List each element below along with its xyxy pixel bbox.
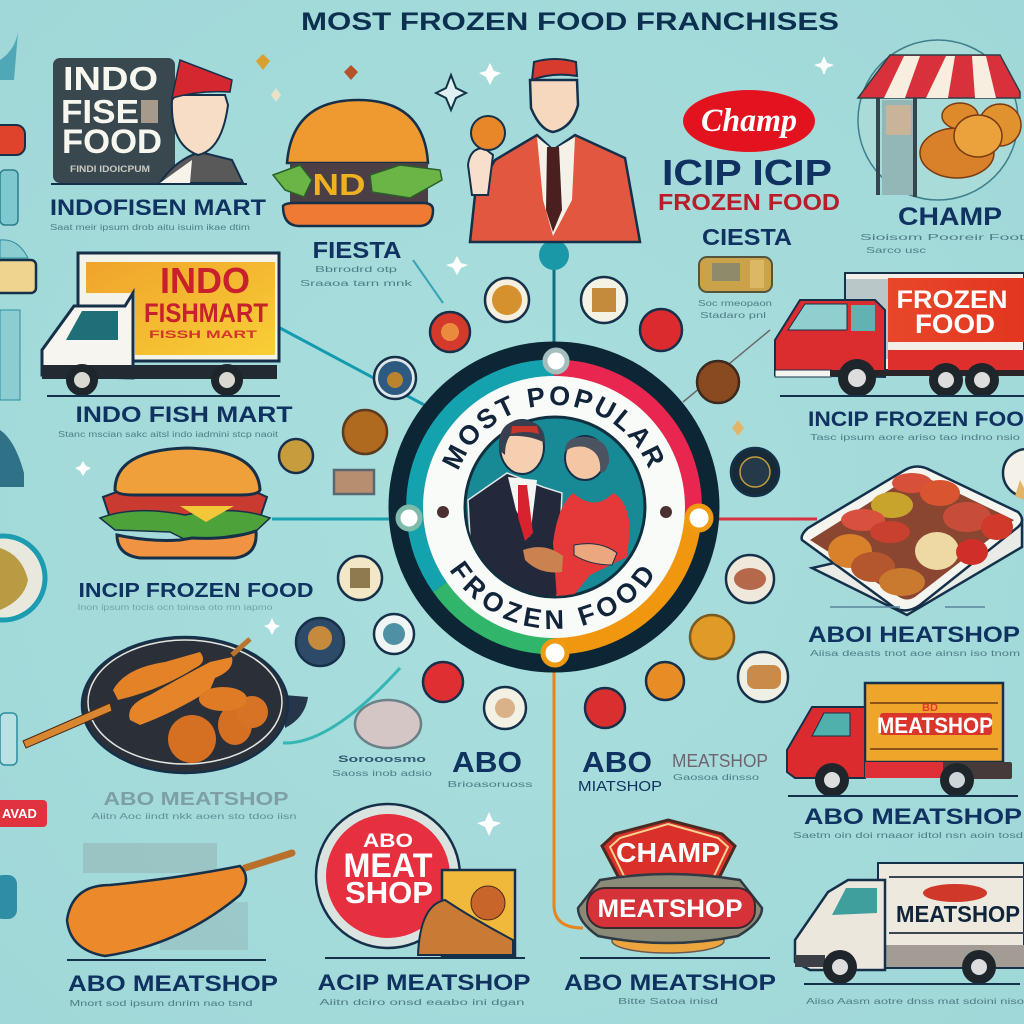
- icon: white Meatshop truck: [795, 863, 1024, 984]
- hub portrait: two franchise owners: [465, 417, 645, 600]
- panel: Icip Icip logo: FROZEN FOOD: [658, 189, 840, 215]
- label: Acip Meatshop: [318, 970, 530, 1007]
- label: Abo Meatshop bottom left: Mnort sod ipsum dnrim nao tsnd: [70, 999, 252, 1008]
- icon: Skillet with skewers: [23, 637, 308, 773]
- label: Abo Heat Shop: Aiisa deasts tnot aoe ainsn iso tnom: [810, 649, 1021, 658]
- left edge fragments: AVAD: [2, 806, 37, 821]
- panel: Indofisen Mart logo: FOOD: [62, 123, 162, 161]
- label: Indo Fish Mart: [58, 402, 293, 439]
- faded map behind sausage: [83, 843, 248, 950]
- panel: Indofisen Mart logo: INDO: [63, 60, 158, 97]
- label: Champ: [860, 203, 1024, 255]
- icon: franchise man in red suit: [468, 59, 640, 242]
- label: Abo Meatshop centre right: MEATSHOP: [672, 751, 768, 771]
- hub heading: bottom: FROZEN FOOD: [450, 560, 652, 630]
- icon: Frozen Food truck: FROZEN: [896, 286, 1008, 314]
- label: Abo + small: ABO: [452, 747, 522, 779]
- icon: burger ND: [273, 100, 442, 226]
- label: Abo Meatshop centre right: [578, 747, 768, 795]
- label: Abo Meatshop, faded: Aiitn Aoc iindt nkk aoen sto tdoo iisn: [92, 812, 296, 821]
- label: Abo Meatshop bottom left: [68, 971, 278, 1008]
- small round icons: [279, 277, 1024, 748]
- label: Abo Meatshop right: ABO MEATSHOP: [804, 804, 1022, 829]
- icon: Indo Fishmart truck: [42, 253, 280, 396]
- label: Ciesta: Stadaro pnl: [700, 311, 766, 320]
- panel: Abo Meat Shop badge: MEAT: [344, 847, 433, 885]
- label: Indofisen Mart: INDOFISEN MART: [50, 195, 267, 220]
- label: Abo Heat Shop: [808, 622, 1021, 658]
- label: Abo Meatshop, faded: ABO MEATSHOP: [104, 789, 288, 809]
- label: Fiesta: [300, 237, 414, 288]
- label: Incip Frozen Foo: Tasc ipsum aore ariso tao indno nsio: [810, 433, 1021, 442]
- label: Abo Meatshop right: [793, 804, 1023, 840]
- icon: white Meatshop truck: MEATSHOP: [896, 901, 1020, 927]
- panel: Icip Icip logo: ICIP ICIP: [662, 152, 832, 193]
- label: Abo Meatshop center: [564, 970, 776, 1006]
- label: Indo Fish Mart: Stanc mscian sakc aitsl indo iadmini stcp naoit: [58, 430, 279, 439]
- label: Incip Frozen Food: Inon ipsum tocis ocn toinsa oto mn iapmo: [78, 603, 273, 612]
- icon: Frozen Food truck: [775, 273, 1024, 397]
- panel: Abo Meat Shop badge: [316, 804, 525, 958]
- label: Champ: CHAMP: [898, 203, 1002, 231]
- label: Abo + small: [448, 747, 532, 789]
- label: Incip Frozen Food: [78, 580, 314, 612]
- label: Abo Meatshop center: Bitte Satoa inisd: [618, 997, 718, 1006]
- label: Abo Heat Shop: ABOI HEATSHOP: [808, 622, 1020, 647]
- label: Incip Frozen Foo: INCIP FROZEN FOO: [808, 408, 1024, 431]
- left edge fragments: [0, 32, 47, 919]
- label: Abo + small: Brioasoruoss: [448, 780, 532, 789]
- panel: Indofisen Mart logo: [51, 58, 247, 184]
- icon: Frozen Food truck: FOOD: [915, 309, 995, 339]
- panel: Abo Meat Shop badge: SHOP: [345, 875, 433, 910]
- label: Indofisen Mart: [50, 195, 267, 232]
- small captions: Sorooosmo: [338, 754, 427, 764]
- panel: Champ Meatshop sign: CHAMP: [616, 837, 720, 868]
- label: Abo Meatshop center: ABO MEATSHOP: [564, 970, 776, 995]
- label: Ciesta: [698, 224, 792, 320]
- label: Fiesta: FIESTA: [312, 237, 402, 263]
- panel: Icip Icip logo: Champ: [701, 103, 797, 139]
- label: Incip Frozen Food: INCIP FROZEN FOOD: [78, 580, 314, 602]
- icon: tray of meats: [802, 466, 1022, 615]
- label: Indo Fish Mart: INDO FISH MART: [76, 402, 293, 427]
- icon: sausage: [67, 853, 292, 960]
- label: Abo Meatshop centre right: Gaosoa dinsso: [673, 773, 760, 782]
- icon: Meatshop truck red & yellow: [787, 683, 1018, 797]
- hub heading: top: MOST POPULAR: [442, 386, 664, 470]
- icon: Champ stall: [858, 40, 1021, 200]
- hub nodes: [398, 350, 711, 665]
- icon: burger ND: ND: [312, 167, 366, 202]
- icon: Indo Fishmart truck: FISHMART: [144, 298, 268, 328]
- panel: Champ Meatshop sign: MEATSHOP: [598, 895, 742, 923]
- panel: Indofisen Mart logo: FINDI IDOICPUM: [70, 164, 150, 174]
- sparkles: [75, 54, 1024, 836]
- label: Champ: Sarco usc: [866, 246, 926, 255]
- node: top connector dot: [539, 240, 569, 270]
- title: MOST FROZEN FOOD FRANCHISES: [301, 8, 839, 36]
- label: Acip Meatshop: ACIP MEATSHOP: [318, 970, 530, 995]
- icon: Meatshop truck red & yellow: MEATSHOP: [877, 713, 993, 738]
- small captions: [332, 754, 433, 778]
- label: Ciesta: CIESTA: [702, 224, 792, 250]
- label: Indofisen Mart: Saat meir ipsum drob aitu isuim ikae dtim: [50, 223, 250, 232]
- icon: large burger: [100, 448, 270, 558]
- label: Abo Meatshop bottom left: ABO MEATSHOP: [68, 971, 278, 996]
- panel: Abo Meat Shop badge: ABO: [363, 831, 413, 852]
- panel: Indofisen Mart logo: FISE: [61, 93, 139, 130]
- label: Abo Meatshop centre right: MIATSHOP: [578, 778, 662, 795]
- label: Abo Meatshop centre right: ABO: [582, 747, 652, 779]
- panel: Icip Icip logo: [658, 90, 840, 215]
- label: Champ: Sioisom Pooreir Foot: [860, 233, 1024, 242]
- icon: Meatshop truck red & yellow: BD: [922, 702, 938, 714]
- small captions: Saoss inob adsio: [332, 769, 433, 778]
- label: Abo Meatshop, faded: [92, 789, 296, 821]
- label: Ciesta: Soc rmeopaon: [698, 299, 772, 308]
- connector lines: [272, 260, 817, 928]
- label: Incip Frozen Foo: [808, 408, 1024, 442]
- icon: Indo Fishmart truck: FISSH MART: [149, 329, 257, 341]
- caption: white truck: Aiiso Aasm aotre dnss mat sdoini niso: [806, 997, 1024, 1006]
- label: Fiesta: Sraaoa tarn mnk: [300, 279, 414, 288]
- label: Fiesta: Bbrrodrd otp: [315, 265, 398, 274]
- panel: Champ Meatshop sign: [578, 820, 770, 958]
- label: Abo Meatshop right: Saetm oin doi rnaaor idtol nsn aoin tosd: [793, 831, 1023, 840]
- icon: Indo Fishmart truck: INDO: [160, 260, 250, 301]
- label: Acip Meatshop: Aiitn dciro onsd eaabo ini dgan: [320, 998, 524, 1007]
